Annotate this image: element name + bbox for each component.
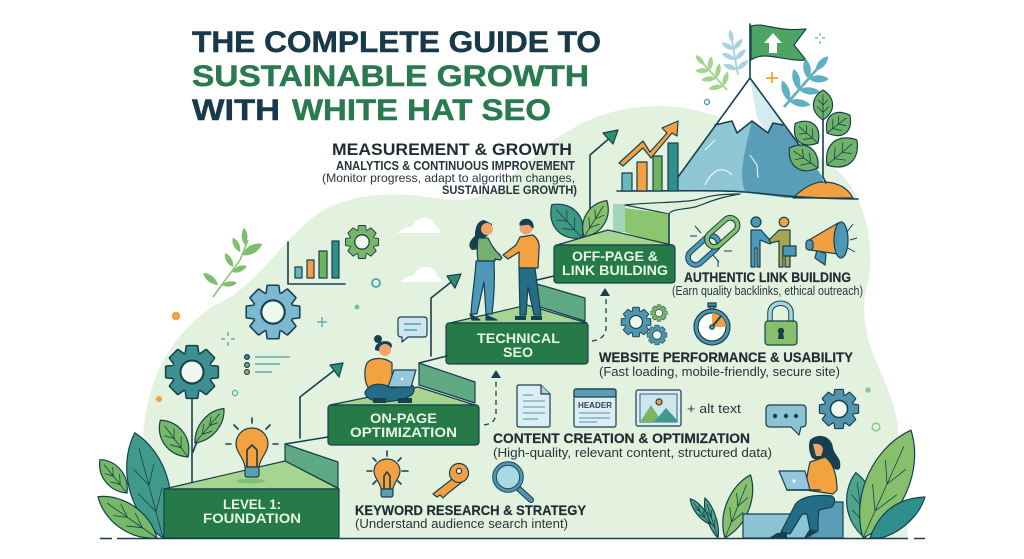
step: level 1 foundation: LEVEL 1: xyxy=(223,496,281,512)
title: SUSTAINABLE GROWTH xyxy=(192,60,589,93)
text: content creation xyxy=(493,430,772,460)
text: content creation: CONTENT CREATION & OPTIMIZATION xyxy=(493,430,750,446)
text: measurement and growth: SUSTAINABLE GROWTH) xyxy=(442,183,577,197)
icon: key xyxy=(433,464,468,498)
people shaking hands xyxy=(469,219,542,320)
list icon xyxy=(245,355,290,374)
clouds xyxy=(397,218,442,282)
ground line xyxy=(100,538,925,540)
icons: website performance xyxy=(622,303,797,345)
step 2 riser xyxy=(285,437,338,488)
icons: link building xyxy=(685,215,857,268)
text: keyword research: KEYWORD RESEARCH & STRATEGY xyxy=(355,502,587,518)
icon: chat bubble xyxy=(766,405,806,435)
flag xyxy=(750,24,806,80)
arrow to technical xyxy=(300,363,343,438)
icons: content creation xyxy=(517,385,741,427)
text: measurement and growth: ANALYTICS & CONTINUOUS IMPROVEMENT xyxy=(336,159,575,173)
text: keyword research: (Understand audience search intent) xyxy=(355,517,568,531)
step 5 road xyxy=(613,194,740,245)
step: technical SEO: TECHNICAL xyxy=(477,330,560,346)
icon: lightbulb xyxy=(367,451,408,497)
icon: image xyxy=(636,390,681,426)
mountain with flag xyxy=(678,24,843,198)
text: measurement and growth: (Monitor progress, adapt to algorithm changes, xyxy=(322,171,575,185)
woman with laptop on step xyxy=(365,335,416,403)
text: website performance: WEBSITE PERFORMANCE & USABILITY xyxy=(599,349,854,365)
text: measurement and growth: MEASUREMENT & GROWTH xyxy=(332,140,572,159)
arrow to off-page xyxy=(431,274,461,356)
icon: stopwatch xyxy=(694,303,730,345)
step: on-page optimization: OPTIMIZATION xyxy=(350,424,457,440)
icon: document xyxy=(517,385,550,427)
icon: handshake people xyxy=(751,217,796,267)
icon: speech bubble xyxy=(398,317,427,342)
bar chart with rising arrow xyxy=(617,121,858,199)
text: authentic link building xyxy=(672,269,863,298)
peak xyxy=(678,78,826,198)
icon: arrow to mountain xyxy=(590,130,618,212)
chart: small bars xyxy=(288,241,345,284)
title xyxy=(192,26,601,127)
icons: keyword research xyxy=(367,451,531,500)
step: technical SEO: SEO xyxy=(503,344,533,360)
step: technical SEO xyxy=(446,305,588,364)
floating decorations xyxy=(156,33,880,431)
icon: header page: HEADER xyxy=(578,401,612,410)
step 4 riser xyxy=(537,276,585,321)
sprigs xyxy=(685,27,843,120)
sprig: left xyxy=(201,228,264,297)
leaves behind off-page step xyxy=(542,195,615,247)
title: THE COMPLETE GUIDE TO xyxy=(192,26,601,59)
woman xyxy=(469,220,502,320)
background blob xyxy=(142,106,908,538)
dashed arrow to technical xyxy=(484,370,501,425)
step: off-page and link building: OFF-PAGE & xyxy=(572,248,658,264)
text: website performance xyxy=(599,349,854,379)
icon: lightbulb on foundation xyxy=(226,418,278,484)
scene: woman on block with laptop xyxy=(687,390,930,547)
text: authentic link building: (Earn quality backlinks, ethical outreach) xyxy=(672,284,863,298)
text: content creation: (High-quality, relevant content, structured data) xyxy=(493,446,772,460)
bottom left leaves xyxy=(91,428,182,548)
icon: megaphone xyxy=(806,222,857,265)
title: WITH xyxy=(192,94,280,127)
step: level 1 foundation: FOUNDATION xyxy=(203,510,301,526)
step: off-page and link building: LINK BUILDING xyxy=(562,262,668,278)
text: alt text: + alt text xyxy=(687,401,741,416)
gear on stem with leaves xyxy=(151,346,231,482)
block seats xyxy=(743,502,843,538)
text: authentic link building: AUTHENTIC LINK BUILDING xyxy=(684,269,851,285)
icon: padlock xyxy=(765,303,797,345)
step: off-page and link building xyxy=(554,230,675,283)
step: on-page optimization xyxy=(328,387,479,445)
man xyxy=(503,219,542,320)
icon: header page xyxy=(574,389,616,427)
icon: magnifier xyxy=(494,464,531,500)
step 3 riser xyxy=(419,356,475,403)
plant and mound xyxy=(782,90,865,198)
dashed arrow to off-page xyxy=(592,288,610,341)
step: level 1 foundation xyxy=(164,461,339,538)
plants: right xyxy=(843,422,930,547)
text: keyword research xyxy=(355,502,587,531)
woman xyxy=(769,436,840,538)
step: on-page optimization: ON-PAGE xyxy=(370,410,437,426)
text: website performance: (Fast loading, mobile-friendly, secure site) xyxy=(599,365,840,379)
title: WHITE HAT SEO xyxy=(292,94,551,127)
text: measurement and growth xyxy=(322,140,577,197)
plants: left of block xyxy=(687,471,761,542)
dots and sparkles xyxy=(156,33,880,431)
icon: chain xyxy=(685,215,741,268)
